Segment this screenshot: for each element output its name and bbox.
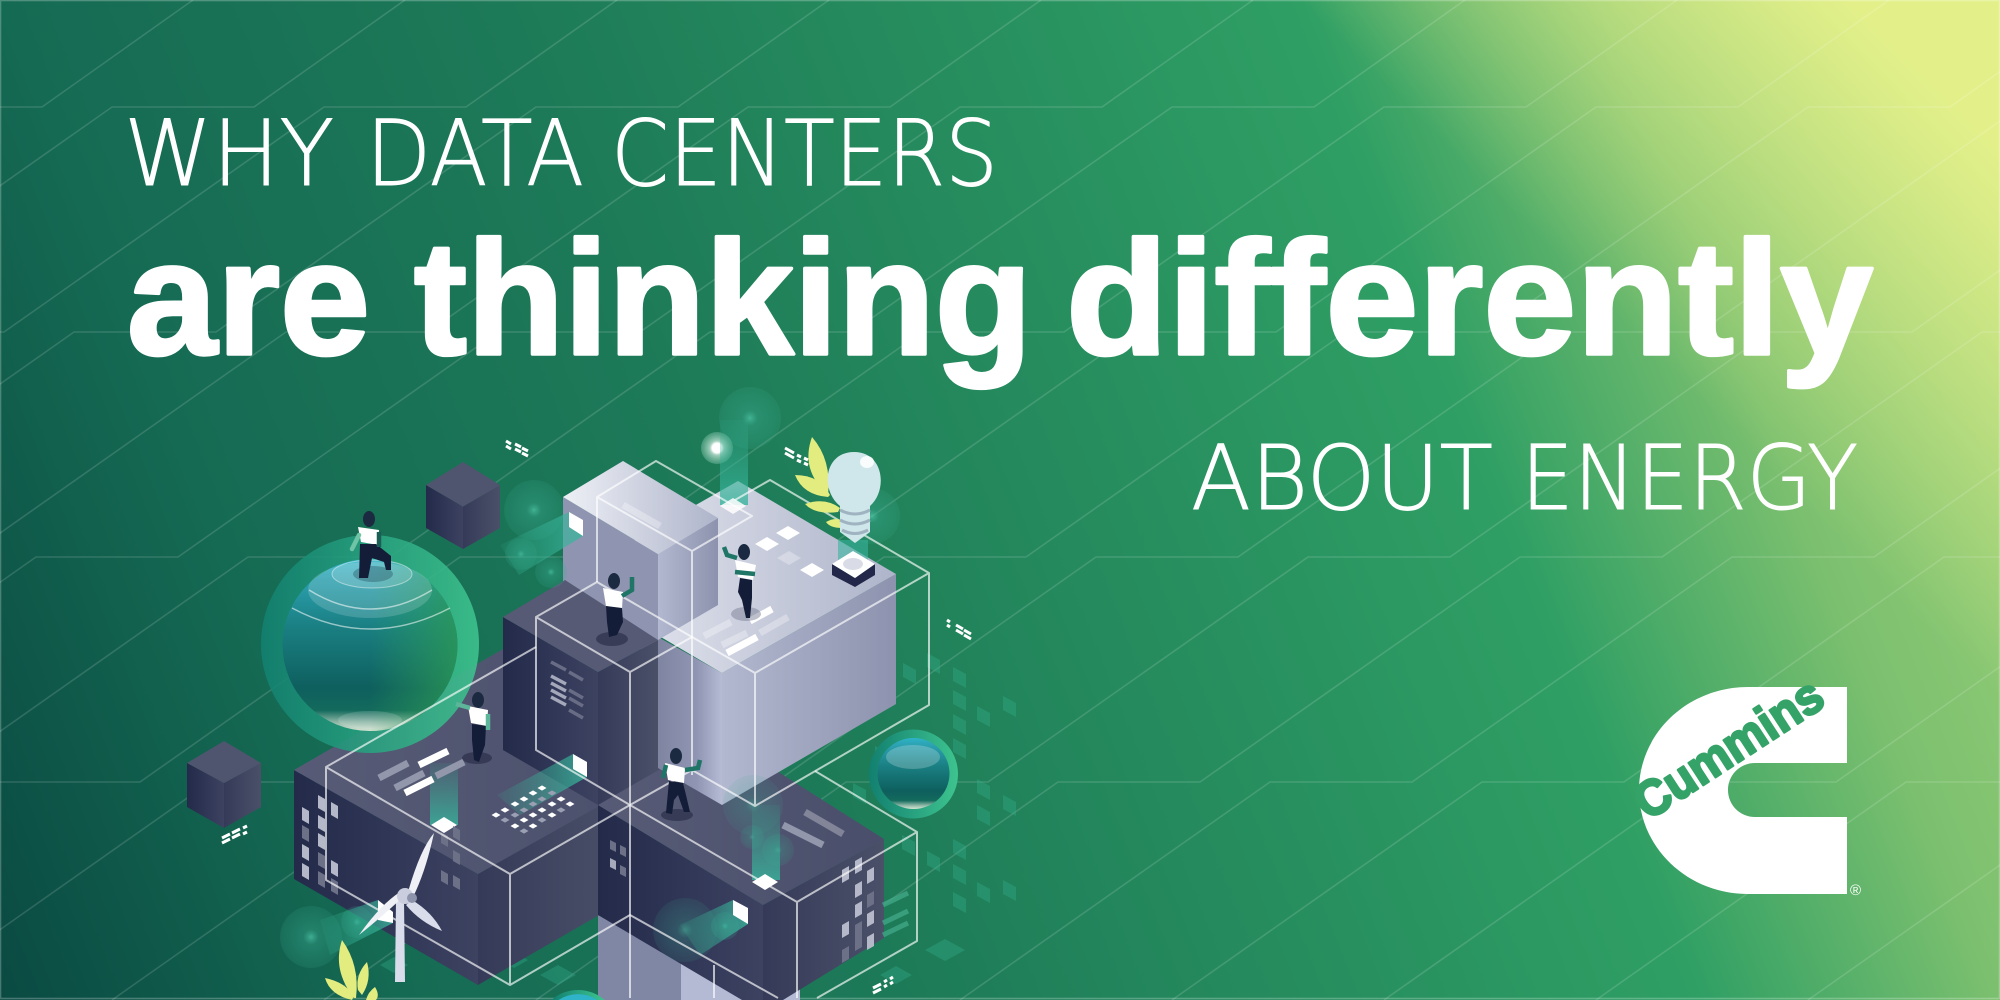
wind turbine: [359, 833, 442, 982]
wireframe outlines: [326, 461, 929, 998]
heading: about energy: ABOUT: [1191, 426, 1493, 530]
light bulb with leaves: [795, 437, 881, 543]
pixel grid on block: [492, 785, 574, 834]
teal beams: [320, 420, 868, 955]
block: dark tower: [503, 580, 658, 805]
heading: are thinking differently: [127, 208, 1873, 389]
logo: Cummins: [1623, 667, 1861, 899]
heading: about energy: [1191, 426, 1858, 530]
illustration: isometric data center: [187, 387, 971, 1000]
block: upper light tower: [563, 461, 718, 660]
person on light block: [724, 544, 761, 621]
glow orbs: [280, 387, 900, 968]
cube: lower: [187, 741, 261, 828]
heading: why data centers: DATA: [366, 102, 584, 207]
person on dark tower: [596, 573, 632, 646]
person on sphere: [352, 511, 393, 582]
heading: why data centers: WHY: [124, 102, 334, 207]
large sphere: [261, 535, 479, 753]
block: dark left: [294, 649, 690, 985]
windows on block faces: [302, 662, 908, 963]
leaves at bottom: [325, 940, 378, 1000]
white tiles: [378, 498, 824, 924]
data tick marks: [222, 441, 971, 993]
heading: are thinking differently: thinking: [414, 208, 1032, 389]
heading: why data centers: [124, 102, 998, 207]
bulb base plate: [832, 551, 875, 587]
glowing light: [701, 432, 733, 464]
block: lower light tower: [598, 915, 800, 1000]
faint pixel squares behind the blocks: [380, 653, 1016, 985]
logo: Cummins: Cummins: [1623, 667, 1833, 830]
heading: are thinking differently: are: [127, 208, 370, 389]
heading: about energy: ENERGY: [1521, 426, 1858, 530]
logo: Cummins: ®: [1850, 882, 1861, 899]
person on left block: [456, 692, 492, 764]
top face bars: [379, 505, 843, 845]
heading: why data centers: CENTERS: [611, 102, 998, 207]
heading: are thinking differently: differently: [1066, 208, 1873, 389]
small sphere: [869, 730, 958, 818]
block: dark right: [598, 735, 884, 1000]
block: large light: [564, 481, 896, 805]
person on right block: [661, 748, 700, 821]
bottom sphere: [552, 990, 604, 1000]
cube: upper: [426, 462, 500, 549]
